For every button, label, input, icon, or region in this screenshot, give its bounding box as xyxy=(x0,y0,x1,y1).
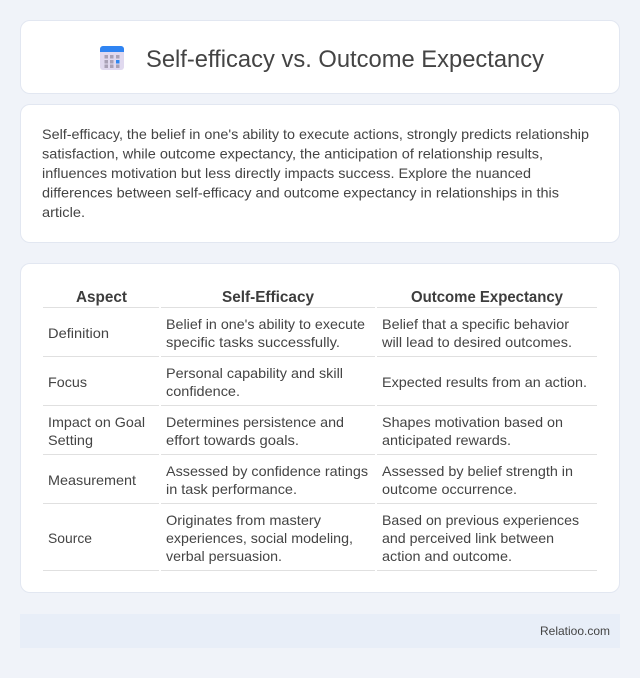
row: focus: Personal capability and skill xyxy=(166,365,343,381)
panel: intro card xyxy=(20,104,620,243)
row: focus: Focus xyxy=(48,374,87,390)
row: impact on goal setting: Setting xyxy=(48,432,93,448)
row: measurement: Assessed by belief strength in xyxy=(382,463,573,479)
table header row: Aspect xyxy=(76,289,127,306)
row: source: Originates from mastery xyxy=(166,512,321,528)
row: definition: Definition xyxy=(48,325,109,341)
intro text: article. xyxy=(42,204,85,220)
row: impact on goal setting: Determines persistence and xyxy=(166,414,344,430)
panel: table card xyxy=(20,263,620,593)
row: source: verbal persuasion. xyxy=(166,548,282,564)
table header row: Outcome Expectancy xyxy=(411,289,563,306)
intro text: Self-efficacy, the belief in one's ability to execute actions, strongly predicts relationship xyxy=(42,126,589,142)
row: definition: specific tasks successfully. xyxy=(166,334,340,350)
row: impact on goal setting: effort towards goals. xyxy=(166,432,299,448)
intro text: satisfaction, while outcome expectancy, the anticipation of relationship results, xyxy=(42,146,543,162)
row: source: action and outcome. xyxy=(382,548,512,564)
row: measurement: in task performance. xyxy=(166,481,297,497)
icon: calendar xyxy=(100,46,124,70)
panel: footer bar xyxy=(20,614,620,648)
row: definition: Belief that a specific behavior xyxy=(382,316,569,332)
row: measurement: Measurement xyxy=(48,472,136,488)
row: impact on goal setting xyxy=(48,414,563,448)
row: definition xyxy=(48,316,572,350)
row: measurement: Assessed by confidence ratings xyxy=(166,463,368,479)
footer text: Relatioo.com xyxy=(540,624,610,638)
row: source xyxy=(48,512,579,564)
row: source: Source xyxy=(48,530,92,546)
row: focus xyxy=(48,365,587,399)
table header row: Self-Efficacy xyxy=(222,289,314,306)
row: measurement xyxy=(48,463,573,497)
row: focus: confidence. xyxy=(166,383,240,399)
row: definition: will lead to desired outcomes. xyxy=(381,334,572,350)
row: impact on goal setting: anticipated rewards. xyxy=(382,432,511,448)
row: definition: Belief in one's ability to execute xyxy=(166,316,365,332)
title: Self-efficacy vs. Outcome Expectancy xyxy=(146,46,544,73)
intro text xyxy=(42,126,589,220)
row: measurement: outcome occurrence. xyxy=(382,481,517,497)
intro text: differences between self-efficacy and outcome expectancy in relationships in this xyxy=(42,184,559,200)
row: source: Based on previous experiences xyxy=(382,512,579,528)
row: impact on goal setting: Shapes motivation based on xyxy=(382,414,563,430)
row: focus: Expected results from an action. xyxy=(382,374,587,390)
comparison table xyxy=(43,289,597,571)
table header row xyxy=(76,289,563,306)
intro text: influences motivation but less directly impacts success. Explore the nuanced xyxy=(42,165,531,181)
row: source: and perceived link between xyxy=(382,530,554,546)
panel: title card xyxy=(20,20,620,94)
row: source: experiences, social modeling, xyxy=(166,530,353,546)
row: impact on goal setting: Impact on Goal xyxy=(48,414,145,430)
